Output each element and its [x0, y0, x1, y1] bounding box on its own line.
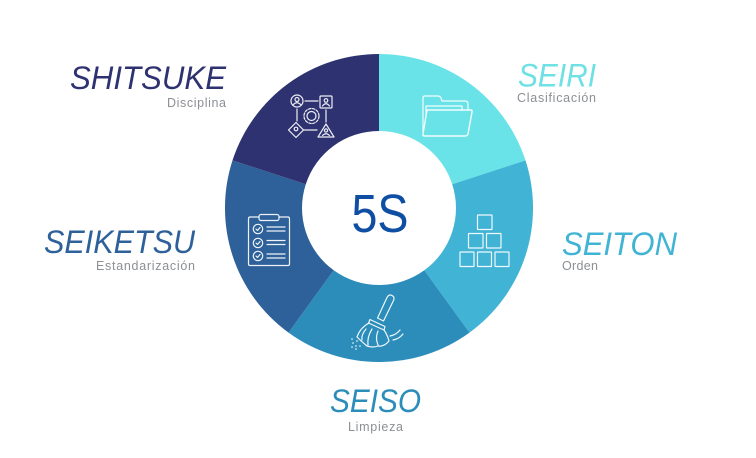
- label: Seiton: SEITON: [562, 226, 678, 262]
- icon: checklist clipboard: [248, 214, 290, 266]
- label: Seiso: SEISO: [330, 383, 421, 419]
- label: Shitsuke: Disciplina: [167, 96, 226, 110]
- label: Seiso: Limpieza: [348, 420, 403, 434]
- label: Seiri: Clasificación: [517, 91, 596, 105]
- donut chart: [225, 54, 533, 362]
- label: Seiton: Orden: [562, 259, 598, 273]
- label: Seiketsu: Estandarización: [96, 259, 195, 273]
- segment: Seiso: [288, 270, 470, 362]
- segment: Seiketsu: [225, 160, 334, 333]
- segment: Seiton: [424, 160, 533, 333]
- icon: stacked boxes: [460, 215, 509, 266]
- label: Shitsuke: SHITSUKE: [70, 60, 227, 96]
- segment: Seiri: [379, 54, 526, 184]
- icon: network with gear: [288, 95, 334, 138]
- segment: Shitsuke: [232, 54, 379, 184]
- icon: broom: [351, 295, 403, 350]
- label: Seiketsu: SEIKETSU: [44, 224, 196, 260]
- icon: folder: [423, 96, 472, 136]
- center label: 5S: [352, 184, 408, 244]
- label: Seiri: SEIRI: [518, 58, 596, 94]
- label: Seiso: [330, 383, 421, 434]
